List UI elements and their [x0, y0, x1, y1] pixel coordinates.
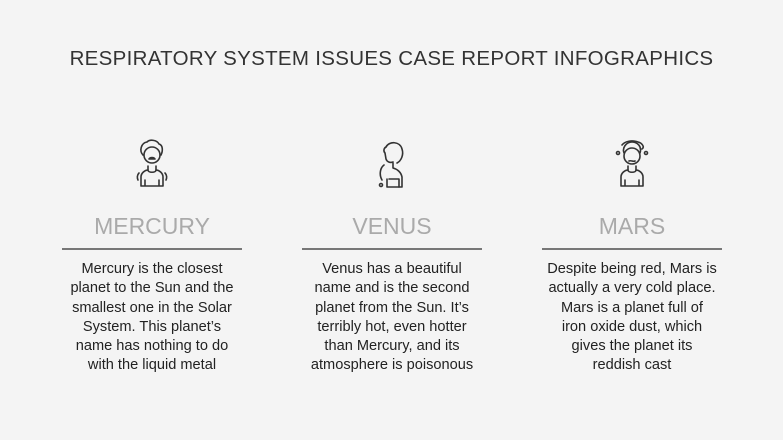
panel: venus — [302, 142, 482, 373]
text: Mercury is the closest — [81, 261, 223, 277]
heading: MERCURY — [94, 213, 210, 239]
text: than Mercury, and its — [324, 338, 460, 354]
text: Despite being red, Mars is — [547, 261, 717, 277]
text — [311, 261, 473, 373]
panel: mercury — [62, 139, 242, 373]
text: actually a very cold place. — [548, 280, 716, 296]
text: planet to the Sun and the — [70, 280, 234, 296]
text: reddish cast — [593, 357, 671, 373]
text — [70, 261, 234, 373]
heading: VENUS — [352, 213, 432, 239]
text: planet from the Sun. It’s — [315, 300, 469, 316]
text: name and is the second — [315, 280, 469, 296]
text: Mars is a planet full of — [561, 300, 703, 316]
text: atmosphere is poisonous — [311, 357, 473, 373]
text: gives the planet its — [572, 338, 692, 354]
text — [547, 261, 717, 373]
panel: mars — [542, 140, 722, 373]
text: terribly hot, even hotter — [317, 319, 467, 335]
text: with the liquid metal — [88, 357, 216, 373]
icon: sick person — [136, 139, 168, 187]
text: smallest one in the Solar — [72, 300, 232, 316]
text: Venus has a beautiful — [322, 261, 462, 277]
text: System. This planet’s — [83, 319, 221, 335]
title: RESPIRATORY SYSTEM ISSUES CASE REPORT INFOGRAPHICS — [70, 47, 713, 70]
text: name has nothing to do — [76, 338, 228, 354]
icon: coughing person — [378, 142, 404, 188]
heading: MARS — [599, 213, 665, 239]
text: iron oxide dust, which — [562, 319, 702, 335]
icon: dizzy person — [616, 140, 648, 187]
